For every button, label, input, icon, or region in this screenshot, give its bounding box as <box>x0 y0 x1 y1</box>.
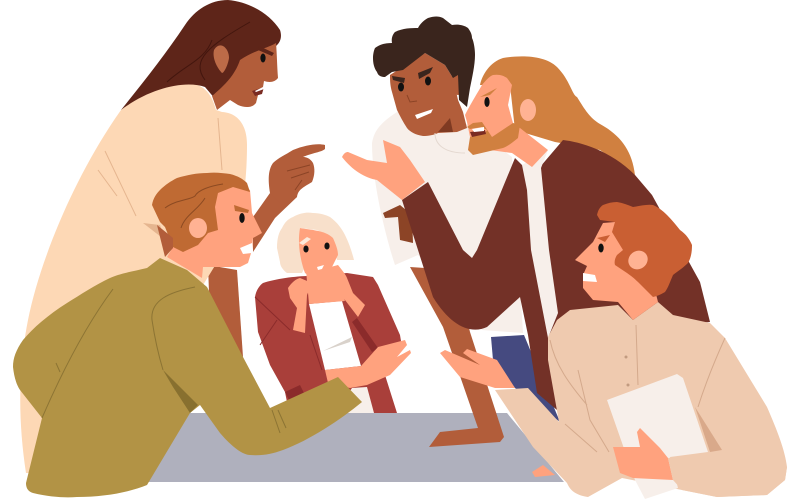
hands at chin <box>288 278 312 333</box>
tablet <box>607 374 708 499</box>
extended hand and belly <box>325 340 411 388</box>
man with olive sweater <box>13 173 362 497</box>
scared woman in red jacket <box>255 213 411 413</box>
man with dark curly hair <box>372 16 560 447</box>
woman with long dark hair <box>20 0 325 473</box>
arm <box>253 193 297 252</box>
eye and brow <box>260 54 266 62</box>
table <box>142 413 564 482</box>
hair back and face <box>277 213 354 273</box>
man with long ginger hair and beard <box>342 56 710 410</box>
ear <box>214 45 229 73</box>
man with red curly hair and tablet <box>440 202 787 499</box>
pointing hand <box>269 144 325 205</box>
neck <box>306 270 345 304</box>
